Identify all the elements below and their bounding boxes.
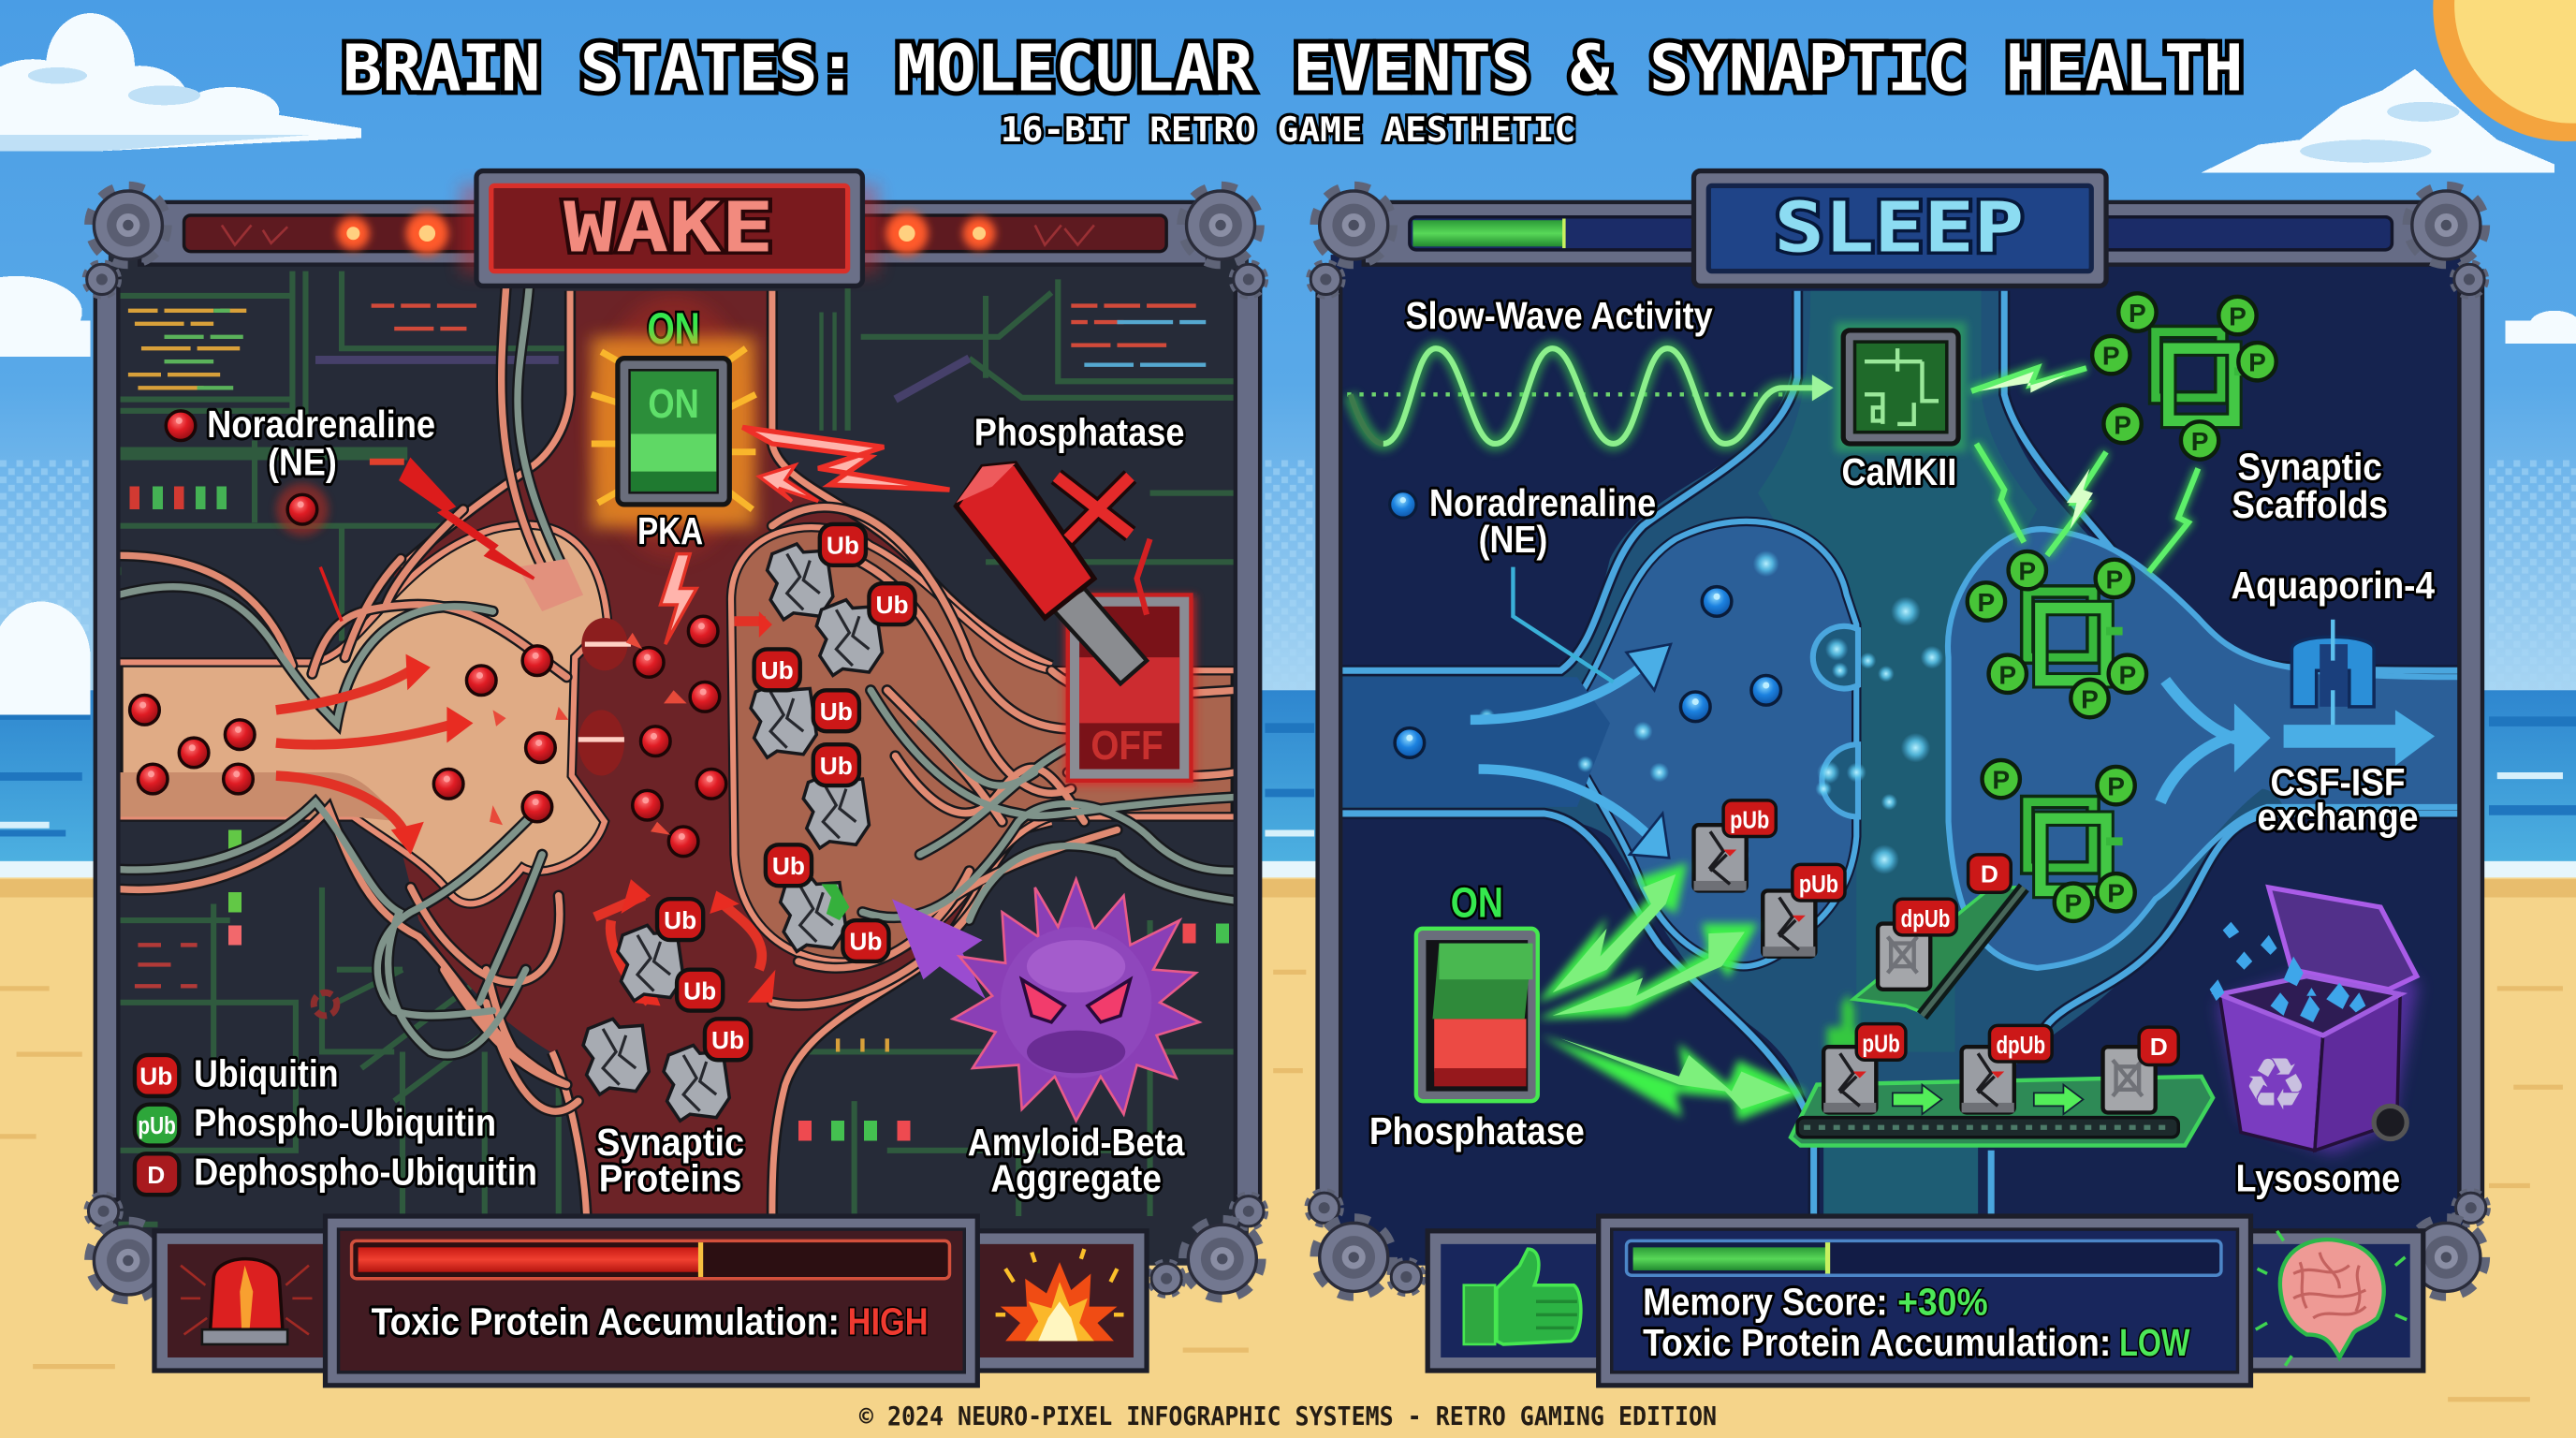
OFF switch: OFF xyxy=(1090,723,1164,769)
PKA switch: ON xyxy=(648,381,699,427)
proteins with tags xyxy=(1694,800,2011,990)
footer: © 2024 NEURO-PIXEL INFOGRAPHIC SYSTEMS - RETRO GAMING EDITION xyxy=(859,1402,1717,1431)
chart: slow-wave xyxy=(1347,348,1834,444)
scaffold: middle: P xyxy=(2105,565,2123,594)
wake frame xyxy=(87,191,1264,1295)
red glow in cleft xyxy=(592,296,755,559)
label: slow-wave activity: Slow-Wave Activity xyxy=(1405,294,1713,337)
label: synaptic proteins xyxy=(596,1121,744,1200)
scaffold: top: P xyxy=(2229,302,2247,331)
label: CSF-ISF exchange: exchange xyxy=(2258,795,2419,838)
label: noradrenaline sleep xyxy=(1390,481,1656,682)
phosphatase switch xyxy=(1416,929,1538,1101)
arrow: noradrenaline release xyxy=(320,461,534,622)
scaffold: middle: P xyxy=(1978,588,1995,617)
scaffold: top: P xyxy=(2248,348,2266,377)
phosphatase switch label ON: ON xyxy=(1451,879,1503,927)
scaffold: middle: P xyxy=(2118,660,2136,689)
proteins with tags: D xyxy=(1981,860,1998,888)
subtitle: 16-BIT RETRO GAME AESTHETIC xyxy=(1001,110,1575,150)
main conveyor: D xyxy=(2150,1033,2168,1061)
glow particles xyxy=(1479,550,1943,874)
label: synaptic scaffolds: Scaffolds xyxy=(2232,483,2388,526)
icon: aquaporin channel xyxy=(2291,620,2374,731)
lightning: phosphatase activation xyxy=(1538,863,1808,1121)
lightning: kinase to scaffolds xyxy=(1971,368,2198,572)
label: aquaporin-4: Aquaporin-4 xyxy=(2231,564,2436,607)
low toxic text: Toxic Protein Accumulation: xyxy=(1643,1321,2111,1364)
toxic text: Toxic Protein Accumulation: xyxy=(372,1299,840,1343)
wake plaque: WAKE xyxy=(564,189,774,269)
lightning: PKA bolt xyxy=(661,554,696,644)
legend: Dephospho-Ubiquitin xyxy=(194,1151,537,1194)
scaffold: lower: P xyxy=(2065,888,2082,917)
icon: hammer blocked xyxy=(956,463,1150,683)
badges: ubiquitin: Ub xyxy=(761,656,794,684)
label: synaptic scaffolds: Synaptic xyxy=(2237,446,2382,489)
wake circuit board pattern xyxy=(118,271,1236,1225)
legend xyxy=(135,1051,537,1195)
label: synaptic proteins: Synaptic xyxy=(596,1121,744,1164)
scaffold: middle xyxy=(1968,551,2146,717)
scaffold: top xyxy=(2092,293,2276,460)
sleep panel background xyxy=(1331,255,2467,1266)
scaffold: middle: P xyxy=(2018,557,2036,586)
badges: ubiquitin: Ub xyxy=(683,976,716,1005)
label: lysosome: Lysosome xyxy=(2236,1157,2400,1200)
legend: Ubiquitin xyxy=(194,1051,339,1094)
lightning: PKA blocks phosphatase xyxy=(742,427,949,501)
scaffold: top: P xyxy=(2129,299,2146,328)
panel: wake xyxy=(87,171,1264,1386)
wake axon bouton xyxy=(118,525,607,903)
legend: Ub xyxy=(139,1063,172,1091)
icon: lysosome recycling bin xyxy=(2210,888,2419,1153)
label: phosphatase wake: Phosphatase xyxy=(974,411,1184,454)
badges: ubiquitin: Ub xyxy=(711,1026,744,1054)
label: CSF-ISF exchange: CSF-ISF xyxy=(2271,761,2405,804)
icon: brain xyxy=(2256,1231,2407,1366)
label: amyloid beta: Amyloid-Beta xyxy=(968,1121,1185,1164)
sleep axon and cleft field xyxy=(1339,291,2459,1142)
sleep vesicle notches xyxy=(1813,626,1858,816)
sleep postsynaptic terminal xyxy=(1948,529,2459,968)
label: noradrenaline wake xyxy=(166,403,435,536)
arrow: amyloid attacks synapse xyxy=(892,899,986,999)
badges: ubiquitin: Ub xyxy=(849,928,882,956)
wake cleft membranes xyxy=(401,291,1051,1216)
sleep frame xyxy=(1309,191,2486,1292)
arrows: glymphatic flow in xyxy=(1471,666,1651,838)
PKA switch xyxy=(592,337,755,527)
low toxic text: LOW xyxy=(2119,1321,2190,1364)
wake flow arrows xyxy=(276,622,766,1003)
scaffold: middle: P xyxy=(2081,685,2099,714)
badges: ubiquitin: Ub xyxy=(875,591,909,619)
scaffold: lower: P xyxy=(2107,772,2125,801)
scaffold: top: P xyxy=(2102,342,2120,371)
sleep channel top and base xyxy=(1758,291,2037,1216)
clouds xyxy=(0,13,2576,715)
OFF switch xyxy=(1064,594,1196,785)
center HUD plate xyxy=(326,1216,977,1386)
wake HUD xyxy=(154,1216,1147,1386)
badges: ubiquitin: Ub xyxy=(772,852,805,880)
PKA switch label ON: ON xyxy=(648,304,700,354)
label: noradrenaline wake: Noradrenaline xyxy=(207,403,435,446)
memory text: +30% xyxy=(1897,1280,1988,1323)
proteins with tags: pUb xyxy=(1730,806,1769,834)
main conveyor: pUb xyxy=(1862,1029,1900,1057)
legend: D xyxy=(147,1161,165,1189)
label: CaMKII: CaMKII xyxy=(1841,450,1956,493)
arrowheads xyxy=(1627,644,1671,858)
label: synaptic proteins: Proteins xyxy=(599,1157,741,1200)
label: noradrenaline wake: (NE) xyxy=(268,440,337,483)
sleep presynaptic terminal xyxy=(1560,521,1856,966)
legend: pUb xyxy=(138,1111,176,1139)
icon: alarm siren xyxy=(181,1259,312,1344)
wake status LEDs xyxy=(130,487,1229,1140)
proteins with tags: dpUb xyxy=(1901,904,1950,932)
scaffold: top: P xyxy=(2114,410,2131,439)
label: phosphatase sleep: Phosphatase xyxy=(1369,1109,1585,1152)
wake code readouts xyxy=(128,306,1206,1051)
sleep membranes xyxy=(1339,291,2459,1216)
icon: explosion xyxy=(996,1249,1123,1341)
sleep axon connector xyxy=(1339,677,1610,807)
wake synaptic cleft xyxy=(394,291,1051,1216)
legend: Phospho-Ubiquitin xyxy=(194,1101,496,1144)
label: noradrenaline sleep: Noradrenaline xyxy=(1429,481,1656,524)
arrows: CSF-ISF exchange xyxy=(2160,681,2435,802)
wake panel background xyxy=(109,255,1249,1266)
scaffold: lower: P xyxy=(2107,879,2125,908)
main conveyor: dpUb xyxy=(1996,1031,2045,1059)
wake plaque xyxy=(460,171,879,286)
wake red release bursts xyxy=(578,618,631,776)
badges: ubiquitin: Ub xyxy=(664,906,696,934)
sleep plaque: SLEEP xyxy=(1775,189,2024,269)
label: amyloid beta: Aggregate xyxy=(990,1157,1162,1200)
sleep noradrenaline spheres xyxy=(1395,587,1781,757)
title: BRAIN STATES: MOLECULAR EVENTS & SYNAPTIC HEALTH xyxy=(343,32,2244,107)
icon: CaMKII chip xyxy=(1835,322,1967,452)
center HUD plate xyxy=(1599,1216,2250,1386)
green bolt debris xyxy=(1827,994,1862,1050)
scaffold: middle: P xyxy=(1998,660,2016,689)
scaffold: lower: P xyxy=(1992,766,2010,795)
badges: ubiquitin xyxy=(657,524,915,1060)
wake postsynaptic terminal xyxy=(731,527,1236,962)
proteins: damaged xyxy=(583,544,882,1121)
ramp conveyor xyxy=(1853,888,2024,1016)
wake tangled filaments xyxy=(118,287,1236,1111)
icon: amyloid beta aggregate xyxy=(953,879,1199,1121)
scaffold: lower xyxy=(1983,760,2135,921)
badges: ubiquitin: Ub xyxy=(820,697,853,726)
memory progress bar xyxy=(1627,1240,2221,1275)
icon: sun xyxy=(2433,0,2576,141)
label: CSF-ISF exchange xyxy=(2258,761,2419,838)
label: PKA: PKA xyxy=(637,509,703,552)
wake recycling mark xyxy=(314,992,337,1016)
sleep plaque xyxy=(1694,171,2106,286)
label: noradrenaline sleep: (NE) xyxy=(1479,518,1547,561)
icon: lysosome recycling bin: ♻ xyxy=(2243,1043,2307,1127)
icon: thumbs up xyxy=(1464,1249,1581,1344)
label: amyloid beta xyxy=(968,1121,1185,1200)
scaffold: top: P xyxy=(2191,427,2208,456)
main conveyor xyxy=(1791,1024,2213,1146)
sleep HUD xyxy=(1427,1216,2423,1386)
memory text: Memory Score: xyxy=(1643,1280,1888,1323)
toxic progress bar xyxy=(352,1240,949,1279)
label: synaptic scaffolds xyxy=(2232,446,2388,526)
badges: ubiquitin: Ub xyxy=(827,532,859,560)
molecules: noradrenaline particles xyxy=(130,616,726,857)
panel: sleep xyxy=(1309,171,2486,1386)
proteins with tags: pUb xyxy=(1799,870,1838,898)
badges: ubiquitin: Ub xyxy=(820,752,853,780)
toxic text: HIGH xyxy=(848,1299,929,1343)
